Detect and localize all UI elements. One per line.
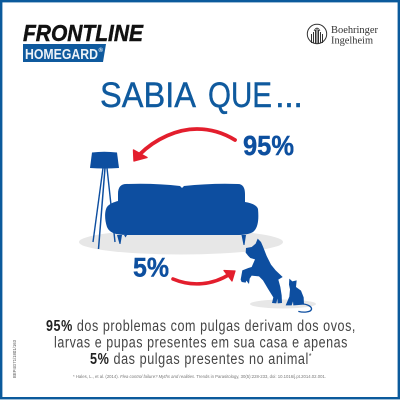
title: ... [275, 76, 303, 115]
logo: Boehringer Ingelheim [307, 24, 379, 46]
icon: floor lamp [90, 152, 119, 249]
floor shadow [79, 230, 283, 254]
logo: Frontline Homegard [23, 20, 144, 63]
icon: dog and cat [241, 239, 312, 312]
logo emblem [307, 24, 327, 44]
statistic: 95%: 95% [243, 130, 294, 161]
Frontline wordmark: FRONTLINE [23, 20, 144, 46]
footnote: * Hales, L., et al. (2014). Flea control failure? Myths and realities. Trends in Parasitology, 30(5):228-233, doi: 10.1016/j.pt.2014.02.001. [73, 374, 326, 379]
icon: cat [286, 279, 312, 312]
title: SABIA [100, 76, 197, 115]
pet shadow [250, 300, 316, 308]
Homegard badge: ® [98, 47, 104, 54]
icon: sofa [105, 184, 258, 245]
side reference code: BEP4G71/1801/163 [12, 340, 17, 378]
arrow: 95% to sofa [134, 129, 235, 161]
description text: 5% das pulgas presentes no animal [90, 351, 354, 368]
description text [46, 318, 356, 368]
Homegard badge: HOMEGARD [25, 47, 98, 63]
title: QUE [208, 76, 272, 115]
logo wordmark: Boehringer [331, 25, 379, 36]
statistic: 5%: 5% [133, 252, 169, 282]
arrow: 5% to pets [173, 270, 235, 284]
title [100, 76, 303, 115]
description text: * [309, 352, 312, 361]
logo wordmark: Ingelheim [331, 36, 373, 46]
icon: dog [241, 239, 283, 303]
